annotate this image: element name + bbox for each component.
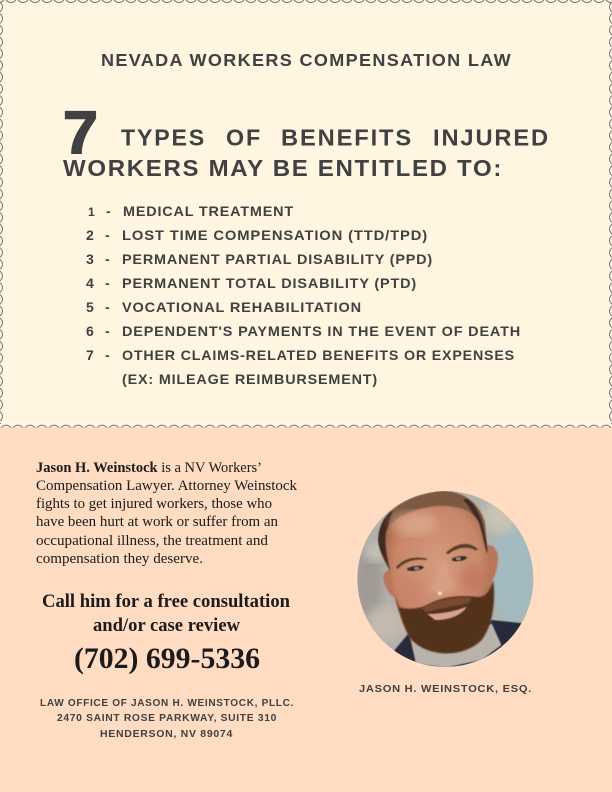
item 6: DEPENDENT'S PAYMENTS IN THE EVENT OF DEATH	[122, 323, 521, 339]
law office address	[40, 697, 294, 740]
title: NEVADA WORKERS COMPENSATION LAW	[101, 50, 512, 70]
item 5: 5	[86, 299, 94, 315]
phone number: (702) 699-5336	[74, 642, 260, 675]
eyebrows	[396, 558, 427, 569]
eyes	[407, 565, 424, 572]
item 6: 6	[86, 323, 94, 339]
call to action: Call him for a free consultation	[42, 592, 291, 612]
cheek redness	[392, 588, 414, 600]
hair	[378, 491, 488, 572]
heading line 1	[121, 124, 550, 150]
item 4: 4	[86, 275, 94, 291]
portrait photo	[357, 491, 534, 667]
nose	[433, 564, 454, 593]
item 7: 7	[86, 347, 94, 363]
heading: 7 types of benefits	[63, 99, 550, 181]
face	[385, 506, 492, 649]
item 4: PERMANENT TOTAL DISABILITY (PTD)	[122, 275, 417, 291]
attorney bio text: have been hurt at work or suffer from an	[36, 514, 278, 530]
attorney bio text: Jason H. Weinstock is a NV Workers’	[36, 460, 262, 476]
item 2: 2	[86, 227, 94, 243]
heading line 1: INJURED	[433, 124, 550, 150]
item 4: -	[105, 275, 110, 291]
attorney bio text	[36, 460, 298, 567]
law office address: LAW OFFICE OF JASON H. WEINSTOCK, PLLC.	[40, 697, 294, 709]
mustache	[422, 598, 472, 612]
item 3: 3	[86, 251, 94, 267]
panel: peach bottom section	[0, 428, 612, 792]
heading line 2: WORKERS MAY BE ENTITLED TO:	[63, 155, 503, 181]
forehead shine	[390, 512, 437, 535]
item 3: PERMANENT PARTIAL DISABILITY (PPD)	[122, 251, 433, 267]
benefits list	[86, 203, 521, 387]
portrait caption: JASON H. WEINSTOCK, ESQ.	[359, 683, 532, 695]
item 6: -	[105, 323, 110, 339]
attorney bio text: compensation they deserve.	[36, 551, 203, 567]
item 7	[86, 347, 515, 387]
attorney bio text: fights to get injured workers, those who	[36, 496, 272, 512]
law office address: 2470 SAINT ROSE PARKWAY, SUITE 310	[57, 712, 277, 724]
ears	[383, 570, 397, 597]
item 2: LOST TIME COMPENSATION (TTD/TPD)	[122, 227, 428, 243]
attorney bio text: Compensation Lawyer. Attorney Weinstock	[36, 478, 298, 494]
item 5: -	[105, 299, 110, 315]
item 3: -	[105, 251, 110, 267]
item 2: -	[105, 227, 110, 243]
suit	[393, 620, 523, 667]
heading line 1: BENEFITS	[281, 124, 413, 150]
item 7: (EX: MILEAGE REIMBURSEMENT)	[122, 371, 378, 387]
big numeral 7: 7	[63, 99, 98, 166]
heading line 1: TYPES	[121, 124, 206, 150]
item 7: OTHER CLAIMS-RELATED BENEFITS OR EXPENSES	[122, 347, 515, 363]
call to action: and/or case review	[93, 616, 241, 636]
item 1: 1	[88, 205, 95, 219]
law office address: HENDERSON, NV 89074	[100, 728, 233, 740]
attorney bio text: occupational illness, the treatment and	[36, 533, 268, 549]
heading line 1: OF	[226, 124, 262, 150]
panel: cream top section	[0, 0, 612, 428]
item 1: -	[106, 203, 111, 219]
call to action	[42, 592, 291, 636]
item 5: VOCATIONAL REHABILITATION	[122, 299, 362, 315]
lips	[427, 607, 467, 620]
item 1: MEDICAL TREATMENT	[123, 203, 294, 219]
item 7: -	[105, 347, 110, 363]
collar	[409, 623, 501, 667]
beard	[394, 580, 494, 653]
